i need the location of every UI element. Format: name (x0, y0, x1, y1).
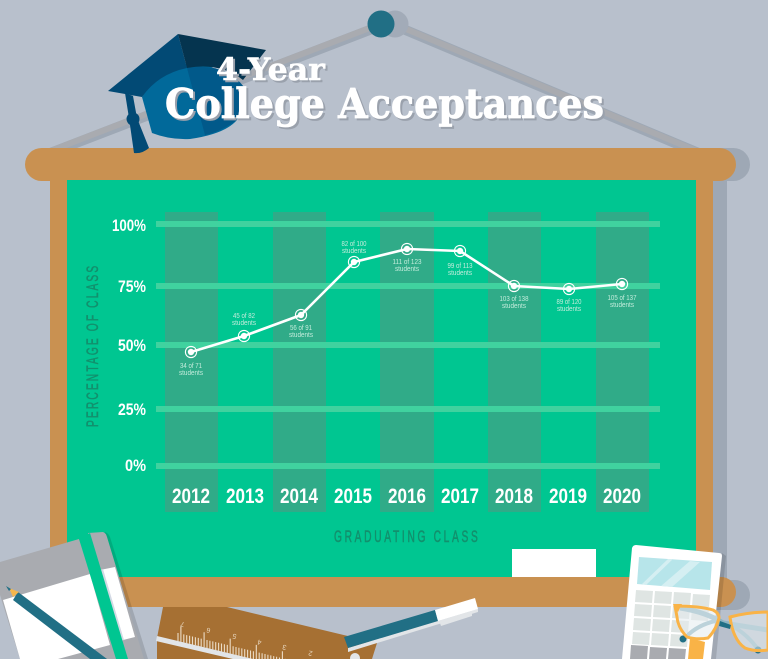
x axis labels: 2018 (495, 485, 533, 508)
y axis labels: 75% (118, 278, 146, 296)
hanging wire (45, 24, 720, 162)
y axis labels: 25% (118, 401, 146, 419)
graduation cap (108, 34, 266, 153)
data labels: 56 of 91 (290, 323, 312, 332)
data labels (179, 239, 636, 377)
x axis labels: 2013 (226, 485, 264, 508)
chalkboard (67, 180, 696, 577)
pen (344, 598, 478, 652)
x axis title: GRADUATING CLASS (334, 528, 478, 546)
data labels: students (557, 304, 581, 313)
x axis labels: 2016 (388, 485, 426, 508)
data labels: students (610, 300, 634, 309)
y axis labels: 0% (125, 457, 146, 475)
data labels: students (232, 318, 256, 327)
data labels: students (502, 301, 526, 310)
notebook (0, 532, 148, 659)
x axis labels: 2017 (441, 485, 479, 508)
trend line (191, 249, 622, 352)
calculator screen (637, 557, 712, 590)
y axis labels: 50% (118, 337, 146, 355)
y axis labels (112, 217, 146, 475)
data points (188, 246, 625, 355)
data labels: 45 of 82 (233, 311, 255, 320)
chalkboard frame (25, 148, 736, 607)
ruler: 6 (206, 626, 211, 633)
title: College Acceptances (165, 80, 604, 128)
data labels: 103 of 138 (500, 294, 528, 303)
data labels: students (289, 330, 313, 339)
pencil (6, 586, 107, 659)
y axis labels: 100% (112, 217, 146, 235)
data labels: 105 of 137 (608, 293, 636, 302)
data labels: students (179, 368, 203, 377)
glasses (673, 604, 768, 654)
eraser (512, 549, 596, 577)
x axis labels: 2014 (280, 485, 318, 508)
x axis labels: 2015 (334, 485, 372, 508)
data labels: 34 of 71 (180, 361, 202, 370)
x axis labels: 2020 (603, 485, 641, 508)
board frame shadow (700, 148, 750, 610)
data labels: 99 of 113 (448, 261, 472, 270)
data labels: 89 of 120 (556, 297, 582, 306)
data labels: students (342, 246, 366, 255)
data labels: 82 of 100 (342, 239, 366, 248)
ruler: 7 (180, 620, 185, 627)
calculator (622, 545, 726, 659)
ruler: 4 (257, 638, 262, 645)
title: College Acceptances (167, 82, 606, 130)
y axis title: PERCENTAGE OF CLASS (84, 266, 102, 427)
x axis labels: 2012 (172, 485, 210, 508)
data labels: 111 of 123 (392, 257, 422, 266)
title: 4-Year (218, 54, 328, 90)
year column bands (165, 212, 649, 512)
wall nail (368, 10, 408, 38)
title (165, 52, 606, 130)
ruler: 2 (308, 649, 313, 656)
ruler: 3 (282, 643, 287, 650)
ruler (156, 607, 377, 659)
x axis labels (172, 485, 641, 508)
line chart (84, 212, 660, 546)
data labels: students (395, 264, 419, 273)
ruler: 5 (232, 632, 237, 639)
title: 4-Year (216, 52, 326, 88)
x axis labels: 2019 (549, 485, 587, 508)
data labels: students (448, 268, 472, 277)
